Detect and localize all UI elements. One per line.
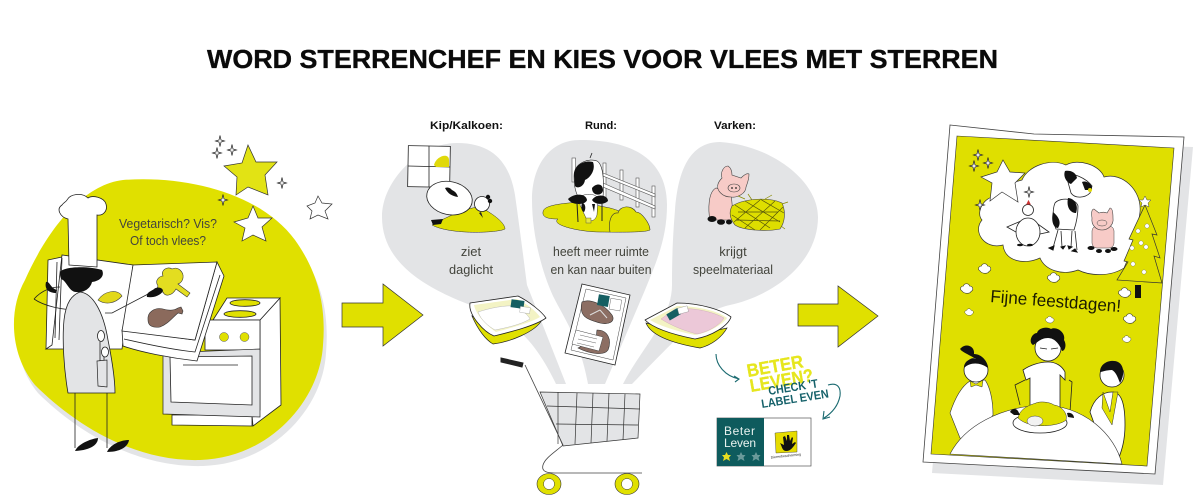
beter leven heading [745,351,815,396]
chicken scene [408,146,505,232]
snow puffs [960,264,1136,342]
right guest [1090,361,1125,460]
bubble captions: en kan naar buiten [550,262,652,277]
stars [212,136,332,241]
beter leven heading: LEVEN? [748,365,815,396]
bubble captions: daglicht [449,262,493,277]
shopping cart [501,358,642,494]
broccoli [157,268,190,297]
thought cloud [979,162,1140,275]
yellow blob [14,179,324,460]
blob shadow [17,187,327,466]
bubble captions: krijgt [719,244,747,259]
pink pig [1088,208,1118,253]
title: WORD STERRENCHEF EN KIES VOOR VLEES MET STERREN [207,44,998,74]
panel: beter leven callout [716,351,840,466]
centre guest [1015,328,1072,412]
curved arrows [716,354,840,419]
hay bale [730,194,788,230]
check label text [760,376,830,411]
bubble pig [623,142,818,384]
panel: christmas poster [923,125,1193,485]
poster yellow field [931,136,1174,466]
plate with food [1010,402,1074,433]
greeting: Fijne feestdagen! [990,286,1122,316]
bubble captions: heeft meer ruimte [553,244,649,259]
bubble captions [449,244,773,277]
pig scene [708,166,788,230]
label card: Dierenbescherming [771,452,801,460]
beter leven heading: BETER [745,351,805,381]
question text: Of toch vlees? [130,233,206,248]
wheels [537,474,639,494]
cow scene [543,153,655,232]
bubble cow [532,140,667,384]
apron pocket with spoons [97,330,108,387]
label headers: Varken: [714,120,756,132]
poster shadow [932,140,1193,485]
left guest [950,346,993,440]
label card: Beter [724,424,755,438]
arrow 2 [798,286,878,347]
label card: Leven [724,436,756,450]
tray pork [645,303,731,348]
panel: chef scene [14,136,332,466]
label headers: Kip/Kalkoen: [430,120,503,132]
stove [163,298,281,426]
check label text: LABEL EVEN [760,386,830,411]
bubble captions: speelmateriaal [693,262,773,277]
tray chicken [470,296,546,344]
bubble captions: ziet [461,244,482,259]
christmas tree [1117,196,1162,298]
cookbook [46,255,224,361]
check label text: CHECK 'T [767,376,819,398]
white chicken [1007,201,1049,246]
bubble chicken [382,143,566,384]
poster star [981,160,1025,202]
label headers [430,120,756,132]
package beef [565,284,630,365]
poster sheet [923,125,1184,474]
arrow 1 [342,284,423,346]
question text: Vegetarisch? Vis? [119,216,217,231]
question text [119,216,217,248]
label headers: Rund: [585,120,617,132]
chicken leg [148,307,183,327]
white cow [1049,171,1092,252]
sparkles [970,150,1034,210]
chef [46,194,163,452]
panel: grey speech bubbles [382,140,818,384]
dinner table [950,405,1122,464]
fish [34,287,122,310]
label card [717,418,811,466]
